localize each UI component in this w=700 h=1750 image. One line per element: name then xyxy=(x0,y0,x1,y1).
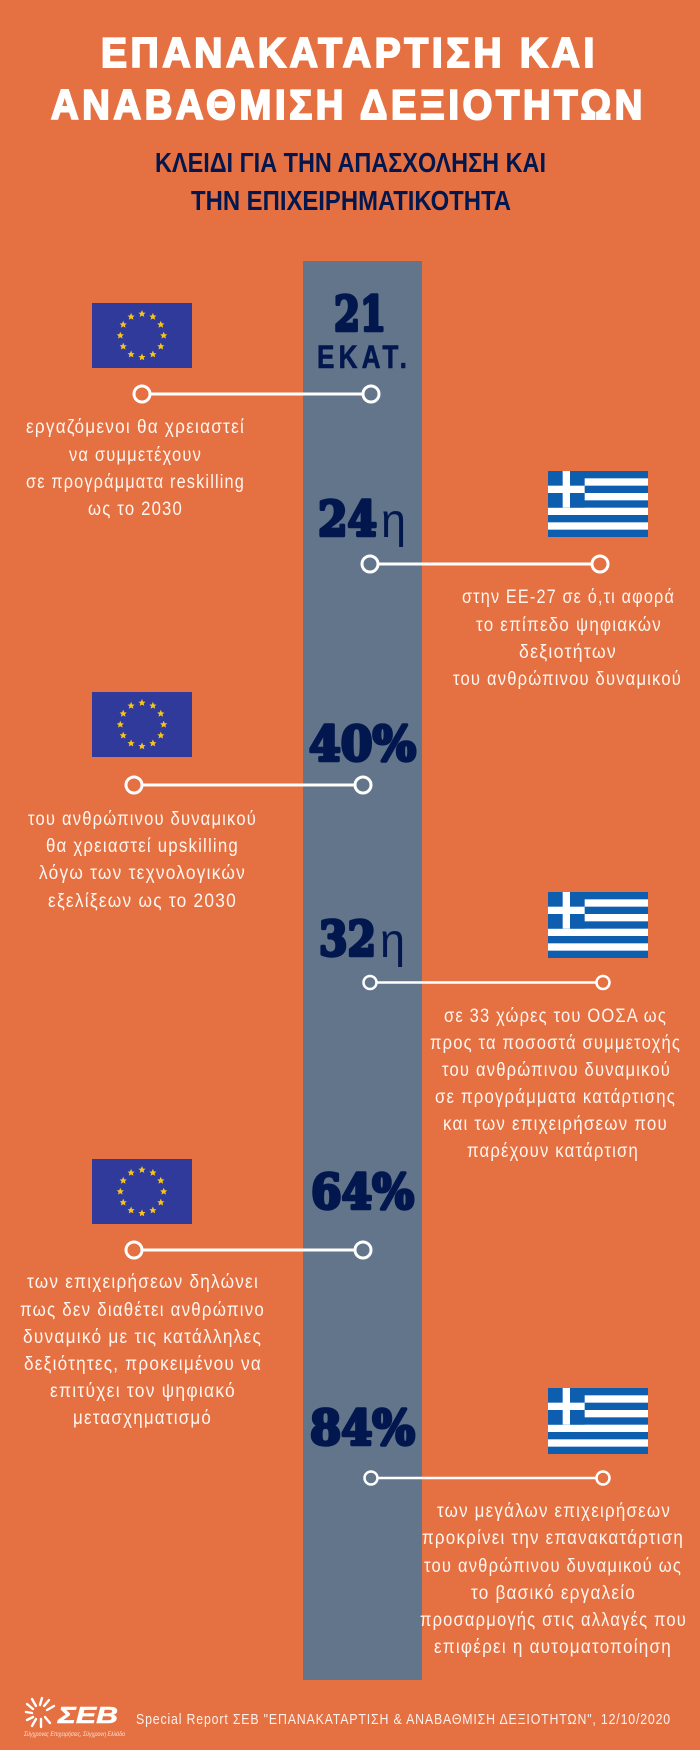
text block: να συμμετέχουν xyxy=(69,444,202,466)
text block xyxy=(20,1271,265,1429)
text block: θα χρειαστεί upskilling xyxy=(46,835,239,857)
stat: 84%: 84% xyxy=(310,1400,415,1456)
panel: 64% of businesses (EU) xyxy=(20,1159,414,1429)
icon: EU flag xyxy=(92,303,192,368)
icon: Greek flag xyxy=(548,471,648,537)
connector xyxy=(126,777,371,793)
panel: 24th in EU-27 (Greece) xyxy=(318,471,682,690)
icon: Greek flag xyxy=(548,892,648,958)
stat: 21 ΕΚΑΤ. xyxy=(317,286,411,375)
tagline: Σύγχρονες Επιχειρήσεις, Σύγχρονη Ελλάδα xyxy=(23,1731,125,1738)
connector xyxy=(364,1472,610,1484)
text block: σε προγράμματα reskilling xyxy=(26,471,245,493)
title xyxy=(51,29,646,128)
stat: 32η: 32 xyxy=(319,912,376,968)
text block: των μεγάλων επιχειρήσεων xyxy=(437,1500,671,1522)
text block xyxy=(453,586,682,690)
stat: 64%: 64% xyxy=(311,1164,414,1220)
title: ΑΝΑΒΑΘΜΙΣΗ ΔΕΞΙΟΤΗΤΩΝ xyxy=(51,81,646,128)
text block: μετασχηματισμό xyxy=(73,1407,212,1429)
stat: 32η: η xyxy=(380,915,405,968)
text block: δυναμικό με τις κατάλληλες xyxy=(23,1326,262,1348)
subtitle: ΚΛΕΙΔΙ ΓΙΑ ΤΗΝ ΑΠΑΣΧΟΛΗΣΗ ΚΑΙ xyxy=(155,147,546,178)
stat: 21 ΕΚΑΤ.: 21 xyxy=(334,286,386,342)
text block: λόγω των τεχνολογικών xyxy=(39,862,246,884)
text block: εξελίξεων ως το 2030 xyxy=(48,890,237,912)
text block: δεξιότητες, προκειμένου να xyxy=(24,1353,262,1375)
connector xyxy=(126,1242,371,1258)
text block: επιτύχει τον ψηφιακό xyxy=(50,1380,236,1402)
subtitle xyxy=(155,147,546,216)
text block: ως το 2030 xyxy=(88,498,183,520)
stat: 24η: η xyxy=(381,495,406,548)
icon: EU flag xyxy=(92,1159,192,1224)
text block: δεξιοτήτων xyxy=(519,641,617,663)
wordmark: ΣΕΒ xyxy=(57,1702,118,1728)
text block xyxy=(430,1005,681,1162)
logo: ΣΕΒ xyxy=(23,1698,125,1738)
panel: 84% of large businesses (Greece) xyxy=(310,1388,687,1658)
text block: το βασικό εργαλείο xyxy=(471,1582,636,1604)
title: ΕΠΑΝΑΚΑΤΑΡΤΙΣΗ ΚΑΙ xyxy=(101,29,598,76)
panel: 40% upskilling (EU) xyxy=(28,692,416,912)
text block: επιφέρει η αυτοματοποίηση xyxy=(434,1636,672,1658)
text block xyxy=(420,1500,687,1658)
icon: sunburst xyxy=(26,1698,54,1727)
connector xyxy=(134,386,379,402)
icon: EU flag xyxy=(92,692,192,757)
stat: 40%: 40% xyxy=(309,716,416,772)
text block: του ανθρώπινου δυναμικού xyxy=(28,808,257,830)
text block xyxy=(28,808,257,912)
panel: 21 million workers (EU) xyxy=(26,286,411,520)
text block: το επίπεδο ψηφιακών xyxy=(476,614,662,636)
connector xyxy=(364,976,610,989)
text block: πως δεν διαθέτει ανθρώπινο xyxy=(20,1299,265,1321)
text block: και των επιχειρήσεων που xyxy=(443,1113,668,1135)
stat: 21 ΕΚΑΤ.: ΕΚΑΤ. xyxy=(317,339,411,375)
icon: Greek flag xyxy=(548,1388,648,1454)
text block: των επιχειρήσεων δηλώνει xyxy=(27,1271,259,1293)
stat: 24η: 24 xyxy=(318,492,377,548)
text block: σε 33 χώρες του ΟΟΣΑ ως xyxy=(444,1005,667,1027)
text block xyxy=(26,416,245,520)
text block: εργαζόμενοι θα χρειαστεί xyxy=(26,416,245,438)
panel: 32nd of 33 OECD countries (Greece) xyxy=(319,892,681,1162)
central vertical bar xyxy=(303,261,422,1680)
text block: παρέχουν κατάρτιση xyxy=(467,1140,639,1162)
connector xyxy=(362,556,608,572)
subtitle: ΤΗΝ ΕΠΙΧΕΙΡΗΜΑΤΙΚΟΤΗΤΑ xyxy=(191,185,511,216)
